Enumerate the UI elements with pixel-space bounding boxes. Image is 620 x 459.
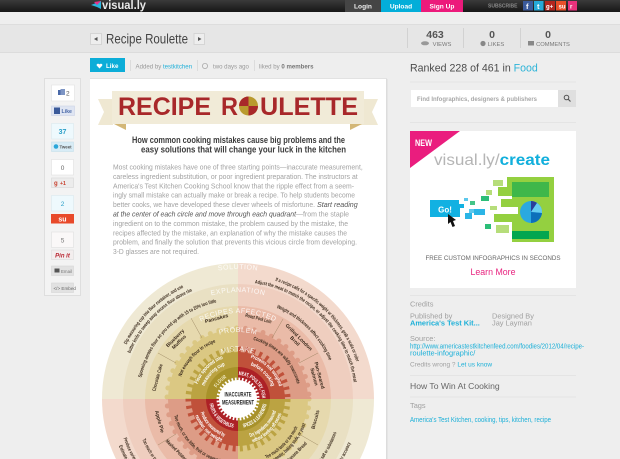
upload button: Upload — [390, 3, 412, 10]
credits: http://www.americastestkitchenfeed.com/foodies/2012/04/recipe- — [410, 342, 584, 350]
quadrant: fruits and vegetables: number, not weight — [195, 414, 222, 442]
quadrant: flour: Chocolate Cake — [152, 363, 165, 392]
intro paragraph: 3-D glasses are not required. — [113, 247, 199, 256]
stumbleupon share — [51, 196, 74, 224]
quadrant: meat, poultry, fish: Cooking times are wildly inaccurate — [254, 336, 300, 384]
quadrant: fruits and vegetables: FRUITS & VEGETABLES — [209, 403, 234, 428]
banner: Recipe Roulette: R — [221, 93, 238, 121]
intro paragraph: better cooks, we have developed these clever wheels of misfortune. — [113, 200, 315, 209]
stat: comments: COMMENTS — [536, 42, 570, 48]
like button: Like — [106, 63, 119, 70]
stat: likes: 0 — [489, 29, 495, 41]
ring headings: MISTAKE — [220, 346, 255, 354]
quadrant: flour: Not enough flour in recipe — [178, 340, 216, 376]
ring headings: SOLUTION — [218, 264, 258, 270]
quadrant: meat, poultry, fish: MEAT, POULTRY, FISH — [238, 371, 266, 398]
stat: likes — [480, 29, 504, 48]
credits: Jay Layman — [492, 318, 532, 328]
quadrant: spices and leaveners: without leveling off excess — [252, 413, 282, 442]
quadrant: meat, poultry, fish: Weight and thickness affect cooking time — [277, 304, 332, 360]
tags: America's Test Kitchen, cooking, tips, kitchen, recipe — [410, 415, 551, 424]
twitter share: Tweet — [60, 144, 72, 150]
credits: Published by — [410, 312, 453, 320]
like and meta row — [90, 58, 314, 72]
credits: roulette-infographic/ — [410, 348, 476, 358]
ring headings: PROBLEM — [218, 327, 257, 334]
subscribe icons — [523, 1, 577, 11]
quadrant: flour: Dip measuring cup into flour container, and use — [124, 286, 184, 344]
illustration: go button — [430, 200, 464, 217]
subtitle: How common cooking mistakes cause big problems and the — [132, 135, 345, 145]
stat: views: 463 — [426, 29, 444, 41]
email button: Email — [61, 269, 72, 274]
clock icon — [202, 63, 208, 69]
quadrant: flour: Spooning aerates flour so you end up with 15 to 20% too little — [138, 299, 216, 378]
credits: Designed By — [492, 312, 534, 320]
facebook share: 2 — [66, 90, 70, 98]
new ribbon — [410, 131, 460, 168]
google plus share: g — [54, 181, 58, 187]
subscribe label: SUBSCRIBE — [488, 4, 518, 10]
center burst: MEASUREMENT — [222, 400, 255, 406]
subscribe icons: r — [570, 4, 573, 10]
pinterest share: Pin it — [55, 254, 71, 260]
upload button — [381, 0, 421, 12]
illustration: go button: Go! — [438, 206, 452, 214]
sign up button: Sign Up — [430, 3, 454, 10]
collection heading: How To Win At Cooking — [410, 381, 500, 391]
intro paragraph: Start reading — [317, 200, 358, 209]
illustration: document with pie chart — [494, 177, 554, 242]
subscribe icons: g+ — [546, 4, 554, 10]
next button — [194, 34, 204, 44]
credits: Credits — [410, 300, 434, 308]
google plus share — [52, 160, 74, 188]
facebook share — [52, 85, 74, 116]
center burst — [218, 379, 258, 419]
banner: Recipe Roulette: ULETTE — [260, 93, 358, 121]
intro paragraph: at the center of each circle and move through each quadrant — [113, 210, 297, 218]
illustration: flying pixels — [464, 180, 509, 233]
tags — [410, 401, 551, 424]
page title: Recipe Roulette — [106, 32, 188, 48]
quadrant: spices and leaveners: SPICES & LEAVENERS — [242, 404, 266, 428]
intro paragraph — [113, 162, 363, 256]
banner: Recipe Roulette: RECIPE — [118, 93, 211, 121]
ring headings — [199, 264, 276, 354]
stumbleupon share: su — [58, 216, 67, 224]
subscribe icons: su — [558, 4, 566, 10]
wheel rings: meat and produce quadrants — [102, 263, 374, 459]
intro paragraph: —from the staple — [296, 210, 349, 218]
previous button — [90, 34, 102, 44]
stumbleupon share: 2 — [61, 201, 65, 208]
quadrant: flour: Blueberry — [165, 328, 186, 349]
facebook share: Like — [62, 109, 72, 115]
google plus share: 0 — [61, 165, 65, 172]
pinterest share — [52, 232, 74, 260]
email button — [52, 266, 74, 276]
quadrant: flour: Pancakes — [204, 313, 229, 325]
quadrant: flour: Flour spooned into — [194, 356, 223, 384]
right column: rank heading: Ranked 228 of 461 in Food — [410, 62, 538, 74]
intro paragraph: ingly small mistake can actually make or break a recipe. To help students become — [113, 191, 355, 200]
title band — [0, 24, 620, 53]
roulette wheel letter O — [239, 96, 258, 116]
quadrant: meat, poultry, fish: Roast Pork Loin — [244, 313, 272, 325]
intro paragraph: Most cooking mistakes have one of three starting points—inaccurate measurement, — [113, 162, 363, 172]
liked by: liked by 0 members — [259, 64, 314, 70]
search box: Find Infographics, designers & publishers — [417, 97, 538, 103]
quadrant: fruits and vegetables: Apple Pie — [153, 410, 165, 434]
quadrant: meat, poultry, fish: Broil — [288, 335, 301, 348]
quadrant: fruits and vegetables: Produce measured by — [200, 412, 226, 438]
ad link: Learn More — [470, 267, 516, 277]
quadrant: meat, poultry, fish: If a recipe calls for a specific weight or thickness, grab a scale or ruler — [276, 278, 359, 362]
login button: Login — [354, 3, 372, 10]
banner: Recipe Roulette — [98, 91, 378, 130]
credits: Credits wrong ? Let us know — [410, 362, 492, 368]
stat: views: VIEWS — [433, 42, 451, 48]
pinterest share: 5 — [61, 238, 65, 244]
intro paragraph: ingredient on to the common mistake, the problem caused by the mistake, the — [113, 219, 348, 228]
ad: visual.ly/create — [410, 131, 576, 288]
quadrant: fruits and vegetables — [119, 403, 234, 459]
icon: cursor — [448, 214, 456, 227]
wheel rings: flour and spices quadrants — [102, 263, 374, 459]
ring headings: EXPLANATION — [210, 287, 265, 296]
subtitle: easy solutions that will change your luck in the kitchen — [141, 144, 346, 154]
share sidebar — [44, 78, 80, 296]
embed button — [52, 283, 76, 292]
quadrant: meat, poultry, fish: Salmon — [308, 367, 319, 386]
wheel: inaccurate measurement — [102, 263, 374, 459]
quadrant: flour: FLOUR — [214, 375, 226, 388]
quadrant: flour — [124, 286, 229, 392]
ad tagline: FREE CUSTOM INFOGRAPHICS IN SECONDS — [426, 255, 560, 262]
quadrant: meat, poultry, fish: Pan-Seared — [312, 361, 325, 390]
top navigation bar — [0, 0, 620, 12]
stat: likes: LIKES — [488, 42, 504, 48]
intro paragraph: recipes affected by the mistake, an explanation of why the mistake causes the — [113, 228, 347, 237]
quadrant: meat, poultry, fish: Proteins not weighed — [250, 354, 283, 386]
embed button: </> Embed — [54, 286, 76, 291]
search box — [411, 90, 576, 107]
credits — [410, 295, 584, 376]
tags: Tags — [410, 401, 426, 410]
subscribe icons: f — [526, 2, 529, 11]
quadrant: spices and leaveners — [242, 404, 352, 459]
quadrant: spices and leaveners: Biscuits — [311, 409, 322, 430]
date: two days ago — [213, 64, 250, 70]
credits: America's Test Kit... — [410, 318, 480, 328]
google plus share: +1 — [60, 181, 66, 187]
twitter share — [52, 124, 74, 152]
intro paragraph: America's Test Kitchen Cooking School know that the ripple effect from a seem- — [113, 181, 354, 190]
ad title: visual.ly/ create — [434, 152, 550, 169]
infographic panel — [90, 78, 388, 459]
subscribe icons: t — [537, 2, 540, 11]
quadrant: flour: butter knife to sweep away excess flour above rim — [127, 289, 192, 354]
center burst: INACCURATE — [224, 392, 252, 398]
quadrant: flour: Muffins — [171, 334, 188, 351]
added by: Added by testkitchen — [136, 64, 192, 70]
ring headings: RECIPES AFFECTED — [199, 308, 276, 322]
quadrant: meat, poultry, fish: before cooking — [250, 362, 274, 386]
stat: views — [421, 29, 451, 48]
sign up button — [421, 0, 463, 12]
intro paragraph: problem, and finally the solution that prevents this vicious circle from developing. — [113, 238, 357, 247]
like button — [90, 58, 125, 72]
intro paragraph: careless ingredient substitution, or poor ingredient preparation. The instructors at — [113, 172, 358, 181]
login button — [345, 0, 381, 12]
quadrant: meat, poultry, fish: Grilled London — [284, 323, 313, 352]
recipe dividers — [158, 318, 318, 445]
quadrant: flour: measuring cup — [202, 363, 224, 386]
new ribbon: NEW — [415, 138, 432, 148]
subtitle — [132, 135, 346, 154]
quadrant: spices and leaveners: Dry ingredients measured — [249, 410, 276, 437]
stat: comments: 0 — [545, 29, 551, 41]
credits: Source: — [410, 334, 435, 343]
quadrant: meat, poultry, fish: Adjust the meat to match the recipe, or adjust the cooking time to match the meat — [254, 280, 357, 382]
twitter share: 37 — [59, 129, 66, 136]
stat: comments — [528, 29, 570, 48]
